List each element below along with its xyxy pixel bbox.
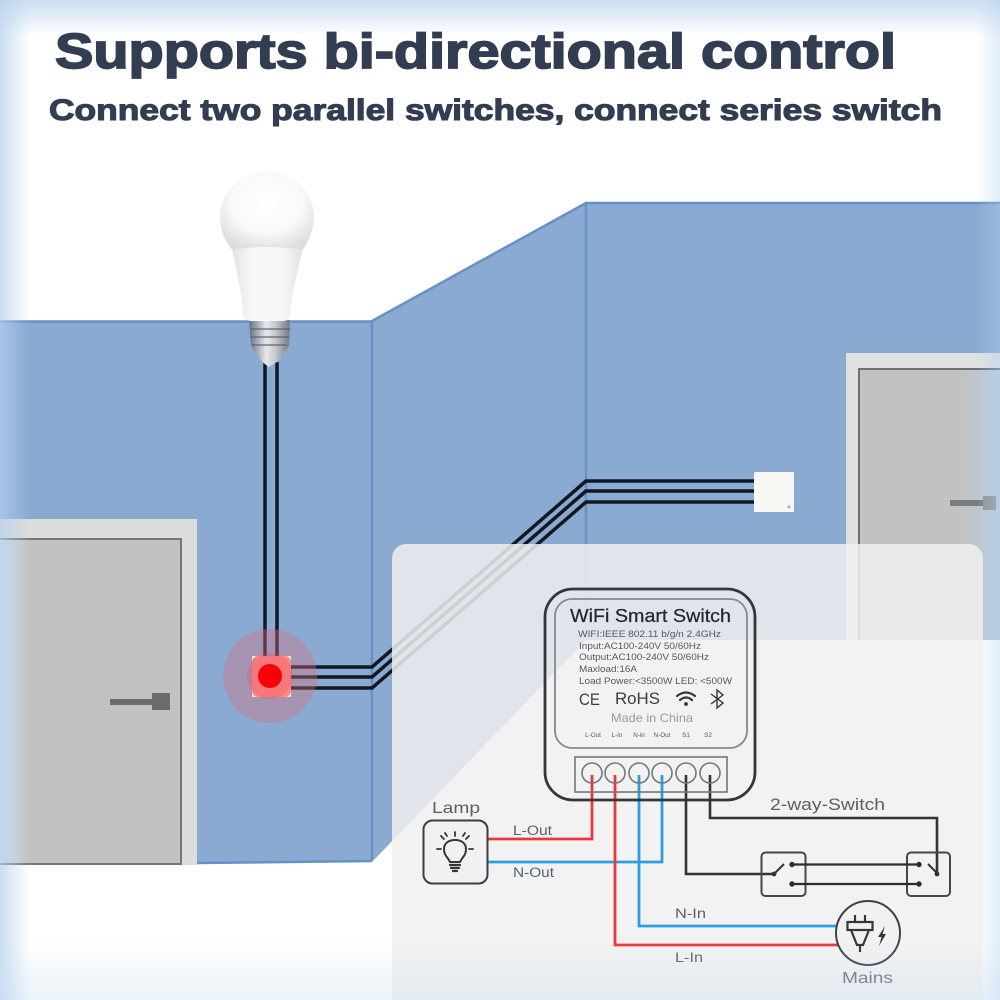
traveller wires xyxy=(790,863,921,886)
terminal labels: L-in xyxy=(612,732,623,739)
RoHS mark: RoHS xyxy=(615,689,660,708)
right switch xyxy=(907,852,950,896)
lamp label: Lamp xyxy=(432,800,480,817)
specifications: Load Power:<3500W LED: <500W xyxy=(579,676,732,687)
left door xyxy=(0,519,197,865)
specifications: WIFI:IEEE 802.11 b/g/n 2.4GHz xyxy=(578,629,721,640)
terminal labels: S2 xyxy=(704,732,712,739)
smart switch module xyxy=(545,589,755,800)
label: 2-way-Switch: 2-way-Switch xyxy=(770,796,885,814)
active switch with red glow xyxy=(223,629,317,723)
module name: WiFi Smart Switch xyxy=(570,605,731,626)
right door handle xyxy=(950,496,996,510)
title: Supports bi-directional control xyxy=(55,25,896,79)
terminal labels xyxy=(585,732,712,739)
label: L-In: L-In xyxy=(675,950,703,965)
label: Mains: Mains xyxy=(842,970,893,987)
icon: lamp xyxy=(437,832,473,871)
label: N-In: N-In xyxy=(675,906,706,921)
wire: L-In xyxy=(615,775,838,945)
CE mark: CE xyxy=(579,690,600,709)
wiring diagram panel xyxy=(392,544,983,1000)
icon: wifi xyxy=(677,692,695,705)
terminal labels: N-Out xyxy=(654,732,671,739)
light bulb xyxy=(220,172,314,367)
terminal labels: L-Out xyxy=(585,732,601,739)
specifications: Maxload:16A xyxy=(579,664,638,675)
specifications xyxy=(578,629,732,687)
two-way switches xyxy=(762,852,950,896)
left door handle xyxy=(110,693,170,710)
specifications: Output:AC100-240V 50/60Hz xyxy=(579,652,709,663)
mains symbol xyxy=(836,901,900,965)
subtitle: Connect two parallel switches, connect series switch xyxy=(49,94,942,127)
icon: bluetooth xyxy=(711,690,723,708)
terminal labels: S1 xyxy=(682,732,690,739)
wire: N-Out xyxy=(487,775,662,862)
icon: plug xyxy=(848,915,872,952)
bottom vignette xyxy=(0,940,1000,1000)
label: N-Out: N-Out xyxy=(513,865,554,880)
made in China: Made in China xyxy=(611,711,693,725)
terminal block xyxy=(575,757,727,792)
wires to the remote switch xyxy=(291,481,756,688)
wires to the bulb xyxy=(265,362,277,656)
blue walls xyxy=(0,202,1000,865)
remote wall switch xyxy=(754,472,794,512)
left switch xyxy=(762,852,806,896)
specifications: Input:AC100-240V 50/60Hz xyxy=(579,641,701,652)
wire: N-In xyxy=(639,775,837,926)
wire: S2 xyxy=(710,775,937,873)
lamp icon box xyxy=(424,820,488,884)
wire: L-Out xyxy=(487,775,592,839)
terminal labels: N-in xyxy=(633,732,645,739)
label: L-Out: L-Out xyxy=(513,823,552,838)
wire: S1 xyxy=(686,775,774,874)
icon: lightning xyxy=(878,926,886,946)
right door xyxy=(846,353,1000,640)
